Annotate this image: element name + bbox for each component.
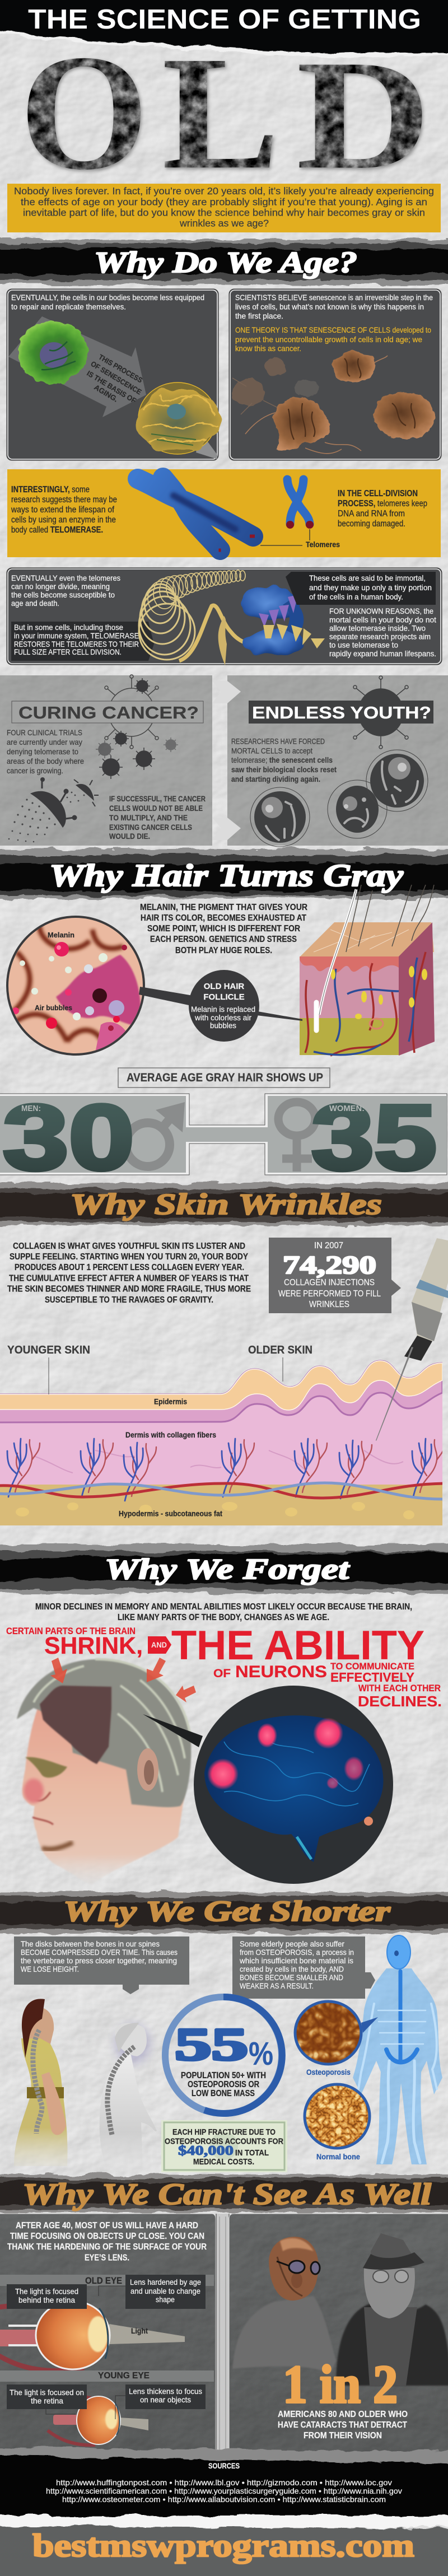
- sources list: http://www.osteometer.com • http://www.allaboutvision.com • http://www.statisticbrain.com: [62, 2495, 386, 2504]
- section heading: Why We Forget: [0, 1544, 448, 1594]
- text: unknown reasons: separate research projects aim: [329, 632, 431, 641]
- red statement typography: EFFECTIVELY: [330, 1670, 414, 1684]
- stat box: collagen injections: WRINKLES: [309, 1300, 349, 1309]
- stat ring: 55 percent: 55: [175, 2019, 248, 2070]
- sources list: http://www.scientificamerican.com • http://www.yourplasticsurgeryguide.com • http://www.nia.nih.gov: [46, 2486, 402, 2495]
- collagen wrinkles: [34, 1450, 403, 1473]
- icon: small cancer cells: [96, 678, 178, 779]
- arrow: senescence process: [8, 316, 146, 417]
- text: collagen explanation: PRODUCES ABOUT 1 PERCENT LESS COLLAGEN EVERY YEAR.: [15, 1263, 244, 1272]
- text: cataracts: FROM THEIR VISION: [304, 2431, 382, 2440]
- icon: telomere spring coil: [139, 570, 260, 661]
- arrows on head: [50, 1658, 196, 1702]
- footer website panel: [0, 2516, 448, 2576]
- icon: osteoporosis bone: Osteoporosis: [306, 2068, 351, 2076]
- callout: lens hardened: Lens hardened by age: [130, 2278, 201, 2286]
- intro yellow box: inevitable part of life, but do you know the science behind why hair becomes gray or skin: [23, 207, 425, 218]
- red statement typography: DECLINES.: [358, 1693, 442, 1710]
- callout: telomerase restores: [11, 622, 154, 661]
- icon: small chromosome: [286, 479, 314, 529]
- mouth and nose: [32, 1792, 53, 1824]
- footer website panel: bestmswprograms.com: [32, 2527, 414, 2564]
- icon: senescent yellow cell: [136, 382, 219, 454]
- text box: disks compress: WE LOSE HEIGHT.: [21, 1964, 79, 1973]
- red statement typography: THE ABILITY: [171, 1623, 424, 1668]
- panel: cells losing ability to replicate: to repair and replicate themselves.: [11, 302, 126, 311]
- panel: focusing and eye lens: TIME FOCUSING ON OBJECTS UP CLOSE. YOU CAN: [10, 2232, 204, 2241]
- text: interestingly: INTERESTINGLY, some: [11, 485, 90, 494]
- text box: osteoporosis: created by cells in the body, AND: [240, 1964, 344, 1973]
- fat layer: [0, 1485, 442, 1525]
- callout: light behind retina: behind the retina: [18, 2295, 75, 2304]
- callout: light focused on retina: the retina: [31, 2396, 63, 2405]
- text: unknown reasons: [329, 606, 436, 658]
- callout: old hair follicle: [139, 970, 302, 1042]
- text: unknown reasons: to use telomerase to: [329, 641, 398, 650]
- icon: three cells: [250, 750, 428, 847]
- callout: light focused on retina: [7, 2384, 87, 2409]
- blood vessel trees: [7, 1439, 445, 1501]
- red statement typography: CERTAIN PARTS OF THE BRAIN: [6, 1626, 136, 1636]
- panel: focusing and eye lens: EYE’S LENS.: [85, 2253, 129, 2262]
- stat ring: 55 percent: LOW BONE MASS: [192, 2089, 255, 2098]
- icon: dissolving cancer cell: [8, 777, 99, 842]
- intro yellow box: Nobody lives forever. In fact, if you’re over 20 years old, it’s likely you’re already experiencing: [14, 185, 434, 197]
- text: cell division: PROCESS, telomeres keep: [338, 499, 427, 508]
- text: melanin explanation: BOTH PLAY HUGE ROLES.: [175, 946, 272, 955]
- red statement typography: WITH EACH OTHER: [358, 1683, 441, 1693]
- text: unknown reasons: mortal cells in your body do not: [329, 615, 436, 624]
- text: researchers: and starting dividing again.: [231, 774, 320, 783]
- text: melanin explanation: [140, 903, 307, 955]
- dollar bill stat: [161, 2120, 287, 2172]
- text box: osteoporosis: [232, 1936, 375, 1999]
- section heading: Why Hair Turns Gray: Why Hair Turns Gray: [49, 858, 404, 893]
- stat ring: 55 percent: [165, 1997, 282, 2113]
- text: telomeres no longer divide: the cells become susceptible to: [11, 590, 115, 599]
- panel: focusing and eye lens: [0, 2214, 216, 2461]
- text box: osteoporosis: from OSTEOPOROSIS, a process in: [240, 1948, 354, 1957]
- icon: magnified follicle circle: [6, 916, 146, 1056]
- callout: lens hardened: shape: [156, 2295, 175, 2304]
- section heading: Why Hair Turns Gray: [0, 849, 448, 898]
- icon: cancer cells: [245, 351, 435, 454]
- section heading: Why Do We Age?: Why Do We Age?: [94, 246, 357, 279]
- text box: disks compress: BECOME COMPRESSED OVER TIME. This causes: [21, 1948, 178, 1957]
- text: cell division: [338, 489, 427, 529]
- text: researchers: telomerase; the senescent cells: [231, 755, 333, 764]
- arrow text: IS THE BASIS OF: [85, 369, 138, 405]
- panel: focusing and eye lens: AFTER AGE 40, MOST OF US WILL HAVE A HARD: [16, 2221, 198, 2230]
- red statement typography: SHRINK,: [44, 1632, 143, 1659]
- dollar bill stat: IN TOTAL: [235, 2148, 269, 2158]
- icon: normal bone: Normal bone: [316, 2152, 360, 2161]
- section heading: Why We Can't See As Well: Why We Can't See As Well: [22, 2177, 431, 2211]
- text: cell division: IN THE CELL-DIVISION: [338, 489, 418, 498]
- panel: telomere restoration: [7, 568, 442, 665]
- stat: 1 in 2: 1 in 2: [283, 2354, 398, 2414]
- icon: male symbol: [126, 1102, 185, 1166]
- text: clinical trials: [7, 728, 84, 775]
- intro yellow box: wrinkles as we age?: [179, 217, 269, 228]
- panels divider column with chevrons: [0, 675, 448, 846]
- stat: men 30: MEN:: [21, 1104, 41, 1113]
- icon: hair skin block: [300, 885, 435, 1056]
- section heading: Why Skin Wrinkles: [0, 1183, 448, 1225]
- red statement typography: TO COMMUNICATE: [330, 1661, 414, 1672]
- text box: osteoporosis: WEAKER AS A RESULT.: [240, 1981, 314, 1990]
- text: if successful: EXISTING CANCER CELLS: [109, 823, 192, 832]
- callout: lens hardened: and unable to change: [130, 2286, 200, 2295]
- illustration: blue skeleton: [353, 1935, 442, 2164]
- text: collagen explanation: THE CUMULATIVE EFFECT AFTER A NUMBER OF YEARS IS THAT: [9, 1273, 249, 1284]
- text: memory decline: LIKE MANY PARTS OF THE BODY, CHANGES AS WE AGE.: [118, 1613, 329, 1622]
- eye: [25, 1757, 67, 1777]
- red statement typography: OF: [213, 1667, 231, 1680]
- text: interestingly: [11, 485, 117, 535]
- sources heading: SOURCES: [208, 2461, 240, 2470]
- section heading: Why Do We Age?: [0, 239, 448, 284]
- label dermis: Dermis with collagen fibers: [125, 1431, 216, 1439]
- callout: telomeres: [260, 529, 340, 549]
- callout: immortal cells: of the cells in a human body.: [309, 592, 403, 601]
- text: unknown reasons: allow telomerase inside. Two: [329, 624, 426, 633]
- icon: virus outline: [105, 675, 158, 749]
- text: cataracts: AMERICANS 80 AND OLDER WHO: [278, 2410, 408, 2419]
- arrow text: AGING.: [92, 383, 119, 404]
- text: telomeres no longer divide: can no longer divide, meaning: [11, 582, 110, 591]
- dollar bill stat: MEDICAL COSTS.: [193, 2157, 254, 2167]
- exposed brain area: [40, 1686, 111, 1764]
- text box: osteoporosis: BONES BECOME SMALLER AND: [240, 1973, 343, 1982]
- text: melanin explanation: MELANIN, THE PIGMENT THAT GIVES YOUR: [140, 903, 307, 912]
- label epidermis: Epidermis: [154, 1398, 187, 1406]
- callout: old hair follicle: bubbles: [210, 1021, 236, 1030]
- AND tag: AND: [151, 1640, 167, 1649]
- text: researchers: MORTAL CELLS to accept: [231, 746, 312, 755]
- text: interestingly: ways to extend the lifespan of: [11, 505, 115, 515]
- arrow text: OF SENESCENCE: [89, 360, 143, 396]
- text: memory decline: MINOR DECLINES IN MEMORY AND MENTAL ABILITIES MOST LIKELY OCCUR BECAUSE THE BRAIN,: [35, 1602, 412, 1612]
- sources list: http://www.huffingtonpost.com • http://www.lbl.gov • http://gizmodo.com • http://www.loc.gov: [56, 2478, 392, 2487]
- sources list: [46, 2478, 402, 2504]
- text: interestingly: body called TELOMERASE.: [11, 525, 103, 535]
- panel: cataracts: [229, 2214, 448, 2461]
- callout: light behind retina: [7, 2284, 87, 2309]
- text: if successful: CELLS WOULD NOT BE ABLE: [109, 804, 203, 813]
- text: interestingly: research suggests there may be: [11, 495, 117, 505]
- AND tag: [148, 1636, 171, 1654]
- text box: disks compress: The disks between the bones in our spines: [21, 1939, 160, 1948]
- text: melanin explanation: HAIR ITS COLOR, BECOMES EXHAUSTED AT: [141, 913, 306, 923]
- hairs: [319, 889, 356, 1015]
- panel: endless youth: [231, 676, 433, 847]
- header torn black band: [0, 0, 448, 58]
- panel: senescence and cancer theory: the first place.: [235, 311, 283, 320]
- panel: focusing and eye lens: THANK THE HARDENING OF THE SURFACE OF YOUR: [7, 2242, 207, 2252]
- section heading: Why We Get Shorter: Why We Get Shorter: [63, 1896, 391, 1928]
- text: if successful: [109, 794, 206, 841]
- dollar bill stat: OSTEOPOROSIS ACCOUNTS FOR: [165, 2137, 283, 2146]
- section heading: Why We Can't See As Well: [0, 2174, 448, 2213]
- pink band: [0, 1361, 442, 1422]
- section heading: Why We Forget: Why We Forget: [105, 1553, 350, 1585]
- illustration: man with glasses: [232, 2237, 336, 2374]
- ribbon tail: [179, 605, 260, 661]
- text: unknown reasons: FOR UNKNOWN REASONS, the: [329, 606, 433, 615]
- icon: osteoporosis bone: [294, 2000, 378, 2076]
- text: collagen explanation: THE SKIN BECOMES THINNER AND MORE FRAGILE, THUS MORE: [7, 1285, 251, 1294]
- label: older skin: [248, 1344, 312, 1382]
- stat box: collagen injections: COLLAGEN INJECTIONS: [284, 1278, 375, 1287]
- icon: young eye: [48, 2395, 148, 2445]
- text: melanin explanation: SOME POINT, WHICH IS DIFFERENT FOR: [147, 924, 300, 934]
- heading band: old eye: [0, 2275, 214, 2286]
- label air bubbles: Air bubbles: [35, 1004, 72, 1012]
- icon: large chromosome: [138, 478, 254, 552]
- title: THE SCIENCE OF GETTING: [28, 4, 421, 35]
- panel: senescence and cancer theory: lives of cells, but what’s not known is why this happens in: [235, 302, 424, 311]
- text: cell division: becoming damaged.: [338, 519, 405, 529]
- icon: neuron brain: [204, 1715, 383, 1862]
- panel: senescence and cancer theory: prevent the uncontrollable growth of cells in old age; we: [235, 335, 422, 344]
- callout: immortal cells: and they make up only a tiny portion: [309, 583, 432, 592]
- callout: immortal cells: These cells are said to be immortal,: [309, 573, 426, 582]
- heading box: CURING CANCER?: [18, 703, 199, 722]
- illustration: older man head: [17, 1658, 196, 1885]
- text: if successful: TO MULTIPLY, AND THE: [109, 813, 188, 822]
- icon: old eye: Light: [131, 2326, 148, 2335]
- text: cataracts: [278, 2410, 408, 2440]
- panel: curing cancer: [7, 675, 206, 842]
- callout: telomerase restores: in your immune system, TELOMERASE: [14, 631, 139, 640]
- section heading: Why We Get Shorter: [0, 1892, 448, 1933]
- heading: average age gray hair: AVERAGE AGE GRAY HAIR SHOWS UP: [127, 1071, 323, 1084]
- callout: telomerase restores: But in some cells, including those: [14, 623, 123, 632]
- illustration: older woman with curved spine: [100, 2023, 157, 2168]
- dollar bill stat: $40,000: [178, 2144, 234, 2158]
- heading: average age gray hair: [118, 1068, 330, 1088]
- illustration: man with hat: [336, 2233, 448, 2386]
- arrow text: [85, 353, 144, 405]
- callout: old hair follicle: FOLLICLE: [203, 992, 245, 1002]
- icon: normal bone: [304, 2083, 371, 2161]
- text: collagen explanation: SUSCEPTIBLE TO THE RAVAGES OF GRAVITY.: [45, 1295, 213, 1305]
- stat box: collagen injections: [269, 1238, 401, 1313]
- callout: old hair follicle: Melanin is replaced: [191, 1005, 255, 1014]
- callout: light focused on retina: The light is focused on: [10, 2388, 84, 2397]
- text box: disks compress: [14, 1936, 189, 1994]
- section heading: Why Skin Wrinkles: Why Skin Wrinkles: [70, 1188, 382, 1221]
- callout: lens thickens: Lens thickens to focus: [129, 2387, 202, 2396]
- text: researchers: [231, 737, 337, 783]
- callout: telomerase restores: FULL SIZE AFTER CELL DIVISION.: [14, 647, 122, 656]
- text: researchers: RESEARCHERS HAVE FORCED: [231, 737, 325, 746]
- stat: women 35: 35: [311, 1086, 437, 1189]
- stat: men 30: 30: [3, 1086, 134, 1189]
- text: memory decline: [35, 1602, 412, 1622]
- label: younger skin: YOUNGER SKIN: [7, 1344, 90, 1356]
- icon: old eye: [0, 2300, 185, 2370]
- text: collagen explanation: SUPPLE FEELING. STARTING WHEN YOU TURN 20, YOUR BODY: [10, 1252, 249, 1262]
- text box: osteoporosis: Some elderly people also suffer: [240, 1939, 344, 1948]
- heading box: ENDLESS YOUTH?: [252, 703, 431, 722]
- text: telomeres no longer divide: [11, 573, 120, 608]
- callout: light behind retina: The light is focused: [15, 2287, 78, 2296]
- icon: virus solid: [353, 676, 408, 749]
- callout: brain bubble: [143, 1686, 393, 1884]
- text: if successful: IF SUCCESSFUL, THE CANCER: [109, 794, 206, 803]
- stat ring: 55 percent: %: [249, 2036, 273, 2072]
- ear: [137, 1748, 158, 1791]
- text: collagen explanation: [7, 1242, 251, 1305]
- intro yellow box: the effects of age on your body (they are probably slight if you’re that young). Aging is an: [21, 196, 427, 207]
- icon: healthy green cell: [17, 321, 88, 384]
- text: melanin explanation: EACH PERSON. GENETICS AND STRESS: [150, 935, 297, 944]
- column between vision panels: [216, 2214, 229, 2460]
- icon: female symbol: [278, 1102, 315, 1172]
- panel: senescence and cancer theory: [229, 289, 441, 460]
- callout: telomerase restores: RESTORES THE TELOMERES TO THEIR: [14, 640, 139, 648]
- stat box: collagen injections: 74,290: [283, 1250, 376, 1279]
- hair: [17, 1659, 191, 1807]
- label hypodermis: Hypodermis - subcotaneous fat: [119, 1510, 222, 1518]
- stat box: collagen injections: WERE PERFORMED TO FILL: [278, 1289, 381, 1299]
- arrow text: THIS PROCESS: [97, 353, 144, 385]
- stat box: collagen injections: IN 2007: [314, 1241, 343, 1250]
- label: older skin: OLDER SKIN: [248, 1344, 312, 1356]
- yellow band: telomerase: [7, 469, 441, 557]
- skin diagram: [0, 1361, 445, 1525]
- text: researchers: saw their biological clocks reset: [231, 765, 337, 774]
- text box: disks compress: the vertebrae to press closer together, meaning: [21, 1956, 177, 1965]
- heading band: young eye: YOUNG EYE: [98, 2371, 150, 2381]
- icon: faint background cancer cells: [232, 358, 318, 414]
- icon: syringe: [376, 1238, 448, 1441]
- heading band: old eye: OLD EYE: [85, 2275, 122, 2286]
- text: clinical trials: FOUR CLINICAL TRIALS: [7, 728, 82, 737]
- callout: old hair follicle: with colorless air: [194, 1013, 251, 1022]
- word OLD in textured slab letters: D: [296, 28, 431, 202]
- word OLD in textured slab letters: L: [162, 23, 280, 203]
- callout: lens hardened: [125, 2275, 206, 2309]
- text: unknown reasons: rapidly expand human lifespans.: [329, 649, 436, 658]
- label melanin: Melanin: [48, 931, 74, 939]
- epidermis: [0, 1361, 442, 1410]
- red statement typography: [6, 1623, 442, 1710]
- text: if successful: WOULD DIE.: [109, 832, 150, 841]
- panel: cells losing ability to replicate: [7, 289, 219, 460]
- stat: women 35: WOMEN:: [329, 1104, 365, 1113]
- text: clinical trials: cancer is growing.: [7, 766, 63, 775]
- heading band: young eye: [0, 2370, 214, 2382]
- stat panel: men and women gray hair age: [0, 1086, 447, 1189]
- callout: old hair follicle: OLD HAIR: [204, 982, 244, 991]
- word OLD in textured slab letters: [20, 21, 431, 204]
- text: telomeres no longer divide: EVENTUALLY even the telomeres: [11, 573, 120, 582]
- text: clinical trials: denying telomerase to: [7, 747, 78, 756]
- panel: cells losing ability to replicate: EVENTUALLY, the cells in our bodies become less equipped: [11, 293, 204, 302]
- main artery and vein: [0, 1483, 445, 1499]
- red statement typography: NEURONS: [235, 1663, 327, 1681]
- text: cataracts: HAVE CATARACTS THAT DETRACT: [278, 2420, 407, 2430]
- text: telomeres no longer divide: age and death.: [11, 599, 59, 608]
- panel: senescence and cancer theory: know this as cancer.: [235, 344, 301, 353]
- callout: immortal cells: [286, 572, 436, 605]
- text: clinical trials: are currently under way: [7, 738, 82, 746]
- callout: lens thickens: on near objects: [140, 2395, 191, 2404]
- word OLD in textured slab letters: O: [20, 21, 148, 204]
- footer black band with sources: [0, 2447, 448, 2523]
- text: interestingly: cells by using an enzyme in the: [11, 515, 116, 525]
- dollar bill stat: EACH HIP FRACTURE DUE TO: [172, 2127, 276, 2137]
- text: collagen explanation: COLLAGEN IS WHAT GIVES YOUTHFUL SKIN ITS LUSTER AND: [13, 1242, 245, 1251]
- stat ring: 55 percent: OSTEOPOROSIS OR: [188, 2080, 259, 2089]
- callout: lens thickens: [125, 2384, 206, 2409]
- text: clinical trials: areas of the body where: [7, 757, 84, 766]
- illustration: young woman with straight spine: [14, 1999, 68, 2166]
- intro yellow box: [7, 184, 441, 232]
- text box: osteoporosis: which insufficient bone material is: [239, 1956, 353, 1965]
- stat ring: 55 percent: POPULATION 50+ WITH: [181, 2071, 266, 2080]
- text: cell division: DNA and RNA from: [338, 509, 405, 519]
- icon: telomerase enzyme: [241, 587, 325, 656]
- callout: telomeres: Telomeres: [306, 540, 340, 549]
